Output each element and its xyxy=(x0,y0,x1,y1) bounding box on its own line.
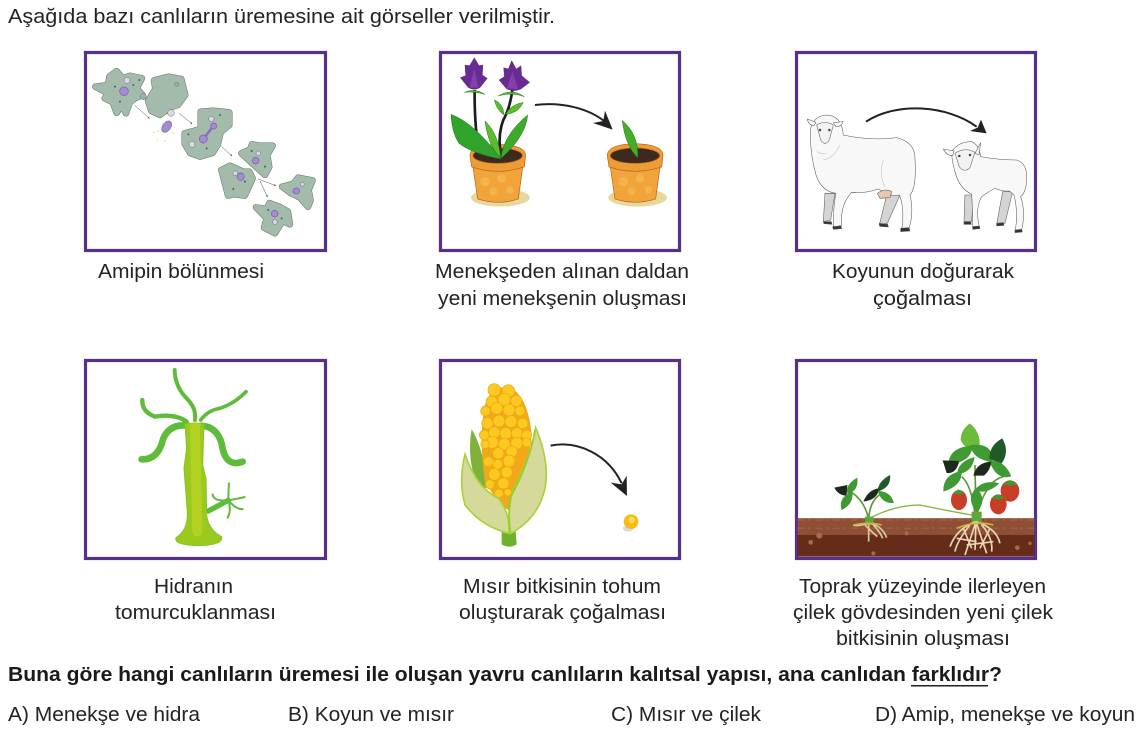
panel: hydra budding xyxy=(86,360,326,558)
caption: strawberry: Toprak yüzeyinde ilerleyen xyxy=(799,576,1046,598)
caption: hydra: tomurcuklanması xyxy=(115,602,276,624)
answer options xyxy=(8,704,1135,726)
caption: hydra: Hidranın xyxy=(154,576,233,598)
caption: hydra xyxy=(115,576,276,624)
intro text: Aşağıda bazı canlıların üremesine ait görseller verilmiştir. xyxy=(8,6,555,28)
answer options: A) Menekşe ve hidra xyxy=(8,704,201,726)
caption: sheep: çoğalması xyxy=(873,288,972,310)
caption: strawberry xyxy=(793,576,1054,650)
caption: sheep xyxy=(832,261,1015,310)
caption: sheep: Koyunun doğurarak xyxy=(832,261,1015,283)
panel: corn seed xyxy=(440,360,680,558)
caption: corn xyxy=(459,576,666,624)
answer options: D) Amip, menekşe ve koyun xyxy=(875,704,1135,726)
panel: strawberry runner xyxy=(796,360,1036,558)
answer options: B) Koyun ve mısır xyxy=(288,704,454,726)
caption: violet xyxy=(435,261,689,310)
caption: violet: yeni menekşenin oluşması xyxy=(438,288,687,310)
caption: corn: oluşturarak çoğalması xyxy=(459,602,666,624)
caption: amoeba: Amipin bölünmesi xyxy=(98,261,264,283)
question: Buna göre hangi canlıların üremesi ile oluşan yavru canlıların kalıtsal yapısı, ana canlıdan farklıdır? xyxy=(8,664,1002,686)
panel: sheep birth xyxy=(796,52,1036,250)
caption: strawberry: bitkisinin oluşması xyxy=(836,628,1010,650)
caption: strawberry: çilek gövdesinden yeni çilek xyxy=(793,602,1054,624)
panel: amoeba division xyxy=(86,52,326,250)
panel: violet cutting xyxy=(440,52,680,250)
caption: violet: Menekşeden alınan daldan xyxy=(435,261,689,283)
caption: corn: Mısır bitkisinin tohum xyxy=(463,576,661,598)
answer options: C) Mısır ve çilek xyxy=(611,704,762,726)
